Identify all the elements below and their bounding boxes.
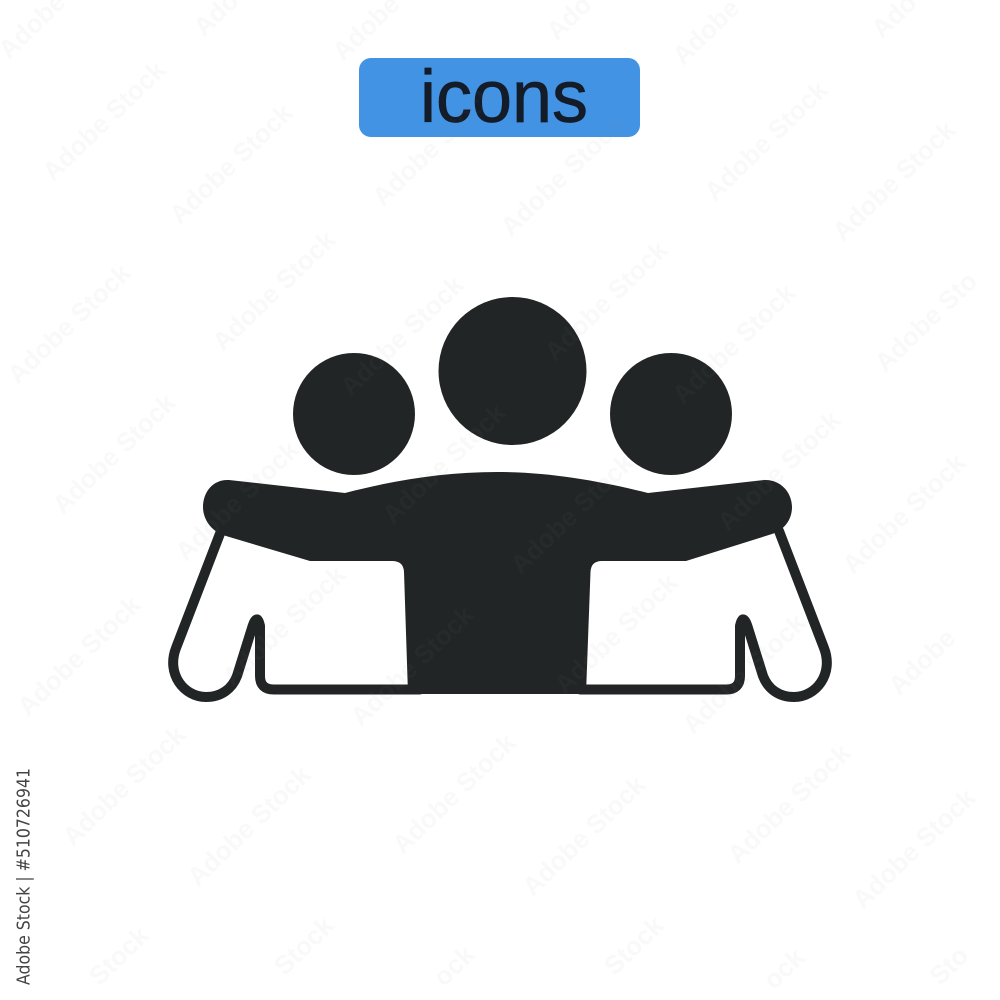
- right person head: [610, 353, 732, 475]
- watermark: repeated Adobe Stock pattern: Adobe Stock: [334, 269, 470, 402]
- watermark: repeated Adobe Stock pattern: Adobe Stock: [538, 234, 674, 367]
- watermark: repeated Adobe Stock pattern: Adobe Stock: [56, 719, 192, 852]
- watermark: repeated Adobe Stock pattern: Adobe Sto: [869, 266, 983, 377]
- right person outline arm and body: [580, 531, 827, 697]
- watermark: repeated Adobe Stock pattern: Adobe Stock: [846, 782, 982, 915]
- badge: icons heading: icons: [420, 55, 588, 138]
- watermark: repeated Adobe Stock pattern: Adobe Stock: [206, 224, 342, 357]
- watermark: repeated Adobe Stock pattern: Adobe Stock: [1, 257, 137, 390]
- watermark: repeated Adobe Stock pattern: Adobe Stock: [46, 387, 182, 520]
- watermark: repeated Adobe Stock pattern: Adobe Stock: [711, 404, 847, 537]
- centre person body with outstretched arms: [203, 472, 792, 694]
- watermark: repeated Adobe Stock pattern: Adobe Stock: [666, 277, 802, 410]
- watermark: repeated Adobe Stock pattern: Adobe: [882, 623, 961, 700]
- watermark: repeated Adobe Stock pattern: Adobe Stock: [11, 589, 147, 722]
- watermark: repeated Adobe Stock pattern: Adobe Stock: [36, 54, 172, 187]
- left person outline arm and body: [173, 531, 420, 697]
- watermark: repeated Adobe Stock pattern: Adobe Stock: [548, 567, 684, 700]
- watermark: repeated Adobe Stock pattern: Adobe Stock: [181, 759, 317, 892]
- watermark: repeated Adobe Stock pattern: Adobe Stock: [676, 607, 812, 740]
- credit: vertical Adobe Stock id: Adobe Stock | #510726941: [14, 768, 34, 985]
- watermark: repeated Adobe Stock pattern: Adobe Stock: [826, 114, 962, 247]
- badge: icons heading: [359, 55, 640, 138]
- watermark: repeated Adobe Stock pattern: Adobe Stock: [721, 737, 857, 870]
- watermark: repeated Adobe Stock pattern: Stock: [83, 920, 155, 991]
- watermark: repeated Adobe Stock pattern: ock: [427, 939, 481, 992]
- watermark: repeated Adobe Stock pattern: Adobe Stock: [376, 397, 512, 530]
- watermark: repeated Adobe Stock pattern: Adobe Stock: [163, 97, 299, 230]
- icon: three people embracing: [173, 297, 827, 697]
- centre person head: [438, 297, 586, 445]
- watermark: repeated Adobe Stock pattern: Adobe Stock: [494, 109, 630, 242]
- watermark: repeated Adobe Stock pattern: Adobe Stock: [386, 727, 522, 860]
- watermark: repeated Adobe Stock pattern: Adobe Stock: [698, 74, 834, 207]
- watermark: repeated Adobe Stock pattern: Adobe Stock: [504, 447, 640, 580]
- watermark: repeated Adobe Stock pattern: ock: [757, 942, 811, 995]
- watermark: repeated Adobe Stock pattern: Adobe Stock: [366, 79, 502, 212]
- watermark: repeated Adobe Stock pattern: Stock: [598, 910, 670, 981]
- watermark: repeated Adobe Stock pattern: Adobe Stock: [169, 434, 305, 567]
- watermark: repeated Adobe Stock pattern: Adobe Stock: [516, 769, 652, 902]
- watermark: repeated Adobe Stock pattern: Stock: [268, 910, 340, 981]
- watermark: repeated Adobe Stock pattern: Adobe Stock: [344, 599, 480, 732]
- watermark: repeated Adobe Stock pattern: Adobe Stock: [836, 447, 972, 580]
- left person head: [293, 353, 415, 475]
- watermark: repeated Adobe Stock pattern: Sto: [923, 940, 974, 991]
- watermark: repeated Adobe Stock pattern: Adobe Stock: [216, 559, 352, 692]
